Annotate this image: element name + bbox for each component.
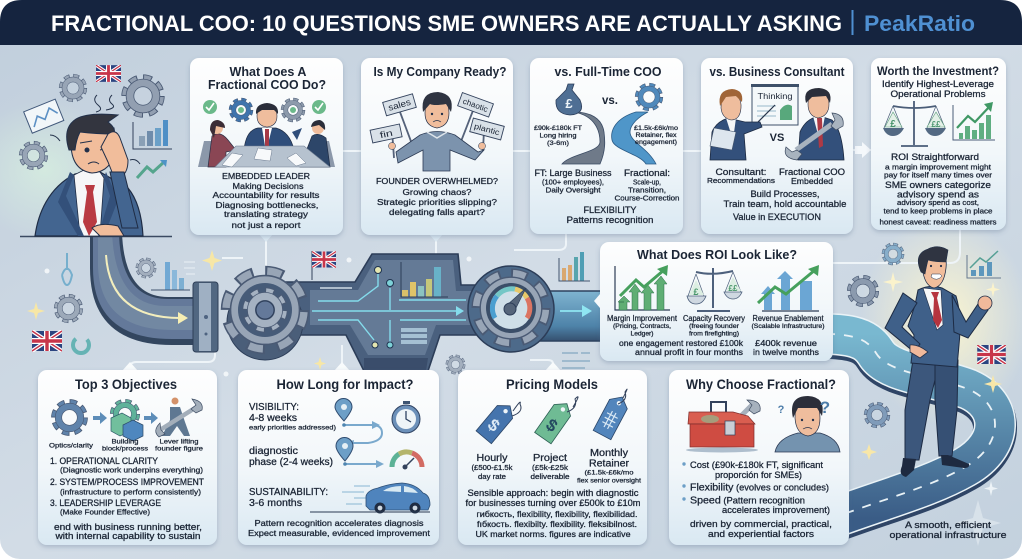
heading: vs. Business Consultant — [710, 65, 845, 79]
revenue caption: (Scalable Infrastructure) — [752, 323, 824, 330]
illustration: overwhelmed founder holding signs: fin — [379, 128, 394, 140]
margin caption: Ledger) — [630, 330, 654, 338]
illustration: overwhelmed founder holding signs: plantic — [473, 122, 501, 137]
body text: Making Decisions — [232, 181, 304, 191]
mini bar chart — [401, 262, 448, 297]
takeaway: FLEXIBILITY — [584, 205, 637, 215]
summary text: Value in EXECUTION — [733, 212, 821, 222]
objectives list: 3. LEADERSHIP LEVERAGE — [50, 498, 161, 508]
icon: teal swirl — [73, 337, 89, 353]
icon: green arrow — [137, 162, 164, 178]
illustration: money road and gear road: £ — [565, 96, 573, 111]
body text: delegating falls apart? — [389, 207, 485, 217]
summary text: Train team, hold accountable — [724, 199, 846, 209]
timeline text: early priorities addressed) — [249, 424, 336, 432]
card background — [871, 58, 1006, 230]
icon captions: Lever lifting — [160, 438, 199, 446]
objectives list — [50, 456, 205, 516]
panel: what does a fractional COO do: Fractional COO Do? — [208, 78, 326, 92]
margin caption — [607, 314, 678, 338]
card background — [190, 58, 343, 235]
closing note — [690, 519, 832, 539]
bullets: Flexibility (evolves or concludes) — [690, 482, 829, 494]
panel: what does ROI look like — [594, 242, 833, 361]
hourly price — [472, 453, 513, 481]
timeline text: diagnostic — [249, 446, 298, 457]
icon: hourly tag: $ — [484, 415, 504, 436]
left arm — [885, 293, 920, 352]
bullets: proporción for SMEs) — [715, 470, 802, 480]
card pointer — [122, 362, 138, 371]
icon: lever figure — [156, 398, 202, 437]
closing note: and experiential factors — [708, 529, 815, 539]
bent pipe — [90, 232, 205, 345]
project price: deliverable — [530, 474, 570, 481]
hourly price: day rate — [478, 474, 506, 481]
heading: Worth the Investment? — [877, 66, 999, 78]
shoes — [901, 455, 969, 477]
raised forearm — [110, 172, 138, 228]
heading: Top 3 Objectives — [75, 377, 177, 392]
icon: gear — [137, 259, 155, 277]
fractional text: Fractional COO — [779, 167, 845, 177]
timeline text: VISIBILITY: — [249, 402, 299, 413]
icon: UK flag on pipe — [312, 251, 336, 280]
closing note: driven by commercial, practical, — [690, 519, 832, 529]
worried founder illustration — [20, 65, 172, 237]
card pointer — [545, 362, 561, 371]
icon: confused person: ? — [778, 404, 785, 416]
margin caption: (Pricing, Contracts, — [613, 323, 671, 330]
icon: balance scales: £ — [890, 119, 896, 130]
heading: What Does A — [230, 65, 306, 79]
body text: Growing chaos? — [402, 187, 472, 197]
hair — [918, 247, 948, 274]
illustration: money road and gear road — [556, 84, 661, 164]
card background — [238, 370, 439, 545]
bullets: accelerates improvement) — [722, 505, 830, 515]
body text: a margin improvement might — [885, 162, 991, 172]
illustration: consultant — [710, 89, 762, 160]
icon: confused person: ? — [820, 398, 830, 417]
icon captions: Optics/clarity — [49, 442, 94, 450]
summary text — [724, 189, 846, 222]
icon: capacity scales — [687, 268, 742, 311]
FT figures — [534, 125, 582, 147]
icon: route with pins — [335, 398, 384, 468]
summary text: Build Processes, — [750, 189, 820, 199]
card pointer — [334, 362, 350, 371]
heading: vs. Full-Time COO — [554, 65, 662, 79]
icon: gears and chart — [850, 245, 1001, 304]
fractional figures: £1.5k-£6k/mo — [634, 125, 678, 132]
icon: broken gear — [866, 404, 888, 426]
header band — [0, 0, 1022, 45]
big gear — [227, 274, 303, 360]
left leg — [905, 360, 940, 460]
consultant text — [707, 167, 775, 185]
illustration: overwhelmed founder holding signs — [370, 92, 504, 171]
FT comparison: (100+ employees), — [542, 178, 604, 186]
icon: monthly tag — [593, 392, 631, 440]
icon: gears and flag — [21, 65, 161, 168]
timeline text — [249, 402, 336, 509]
icon: growth chart — [953, 102, 995, 140]
body text: SME owners categorize — [885, 180, 991, 190]
objectives list: 2. SYSTEM/PROCESS IMPROVEMENT — [50, 477, 205, 487]
caption: operational infrastructure — [890, 530, 1007, 540]
icon: line chart card — [24, 99, 64, 133]
card pointer — [594, 294, 600, 308]
heading: Is My Company Ready? — [374, 65, 506, 79]
eyes and mouth — [80, 141, 108, 164]
fractional text: Embedded — [791, 176, 833, 186]
capacity caption — [683, 314, 745, 338]
circuit lines — [312, 274, 466, 342]
heading: Why Choose Fractional? — [686, 377, 836, 392]
project price: Project — [533, 453, 567, 464]
fractional comparison: Fractional: — [624, 168, 670, 178]
monthly retainer price: Monthly — [590, 448, 628, 459]
data rows — [401, 328, 427, 344]
closing note: Pattern recognition accelerates diagnosis — [254, 518, 424, 528]
vs label: vs. — [602, 95, 618, 107]
card pointer — [429, 234, 443, 242]
FT comparison: FT: Large Business — [534, 168, 612, 178]
icon captions: block/process — [102, 446, 149, 452]
caption — [890, 520, 1007, 540]
consultant text: Consultant: — [716, 167, 766, 177]
tie — [83, 185, 97, 236]
bullets: Cost (£90k-£180k FT, significant — [690, 460, 823, 470]
consultant text: Recommendations — [707, 176, 775, 185]
proof points — [619, 338, 819, 357]
desk — [20, 236, 172, 238]
body text: Strategic priorities slipping? — [377, 197, 497, 207]
proof points: in twelve months — [753, 347, 819, 357]
card background — [701, 58, 853, 234]
icon: arrow — [93, 412, 107, 424]
icon: stopwatch — [392, 401, 420, 433]
hair — [67, 114, 118, 150]
proof points: £400k revenue — [755, 338, 817, 348]
FT comparison — [534, 168, 612, 194]
timeline text: SUSTAINABILITY: — [249, 487, 328, 498]
icon: gear left — [56, 296, 81, 321]
body text: Diagnosing bottlenecks, — [216, 200, 318, 210]
icon: project tag — [535, 398, 575, 444]
card background — [669, 370, 849, 545]
shirt and tie — [923, 288, 943, 330]
icon: small bar chart right — [559, 252, 590, 281]
FT figures: Long hiring — [540, 132, 577, 140]
pricing notes: Sensible approach: begin with diagnostic — [468, 488, 639, 498]
closing note: Expect measurable, evidenced improvement — [248, 528, 431, 538]
card background — [361, 58, 513, 235]
circuit nodes — [372, 266, 394, 348]
closing note: end with business running better, — [54, 522, 202, 532]
lapels — [58, 172, 118, 236]
panel: vs business consultant — [701, 58, 853, 234]
small decorations around pipe — [27, 250, 590, 376]
fractional comparison — [614, 168, 680, 202]
project price — [530, 453, 570, 481]
icon: balance scales: ££ — [932, 120, 941, 129]
road to the right-hand leader — [790, 334, 995, 522]
icon: UK flag — [977, 345, 1006, 364]
pricing notes — [466, 488, 640, 539]
heading: How Long for Impact? — [276, 377, 414, 392]
pricing notes: for businesses turning over £500k to £10m — [466, 498, 640, 508]
connecting pipe body — [270, 254, 490, 371]
subheading: Identify Highest-Leverage — [882, 79, 994, 89]
panel: vs full-time COO — [530, 58, 683, 234]
face — [71, 126, 116, 173]
gauge arc — [492, 289, 530, 318]
hourly price: (£500-£1.5k — [472, 465, 513, 472]
fractional comparison: Scale-up, — [633, 178, 661, 186]
pricing notes: fıбкость. flexibilty. flexibility. fleksibilnost. — [477, 520, 637, 529]
head — [922, 248, 946, 288]
capacity caption: (freeing founder — [689, 323, 739, 330]
monthly retainer price: flex senior oversight — [577, 478, 641, 484]
body text — [880, 152, 997, 226]
shirt — [74, 170, 104, 236]
closing note: with internal capability to sustain — [54, 531, 201, 541]
body text: advisory spend as cost, — [897, 200, 979, 207]
icon: arrow — [144, 412, 158, 424]
right arm — [952, 295, 988, 338]
icon: revenue chart — [758, 265, 819, 311]
subheading — [882, 79, 994, 99]
panel: pricing models — [458, 362, 647, 545]
panel: worth the investment — [871, 58, 1006, 230]
icon: arrow between consultant and worth cards — [855, 142, 871, 158]
gauge gear — [468, 266, 554, 352]
body text — [376, 176, 498, 217]
FT figures: £90k-£180k FT — [534, 125, 582, 132]
FT figures: (3-6m) — [547, 140, 569, 147]
icon: capacity scales: £ — [693, 287, 699, 297]
proof points: annual profit in four months — [635, 347, 743, 357]
icon: sparkle — [202, 250, 222, 271]
fractional text — [779, 167, 845, 186]
bullets: Speed (Pattern recognition — [690, 496, 805, 506]
proof points: one engagement restored £100k — [619, 338, 744, 348]
card background — [458, 370, 647, 545]
timeline text: 3-6 months — [249, 498, 302, 509]
subheading: Operational Problems — [890, 89, 986, 99]
icon captions: founder figure — [155, 446, 203, 452]
body text — [212, 171, 320, 230]
hourly price: Hourly — [476, 453, 508, 464]
icon: sparkle below — [314, 357, 326, 370]
body text: not just a report — [232, 220, 301, 230]
icon: tag strings — [512, 389, 627, 416]
caption: A smooth, efficient — [905, 520, 992, 530]
monthly retainer price: Retainer — [589, 458, 630, 470]
connector lines — [130, 150, 960, 372]
icon captions: Building — [112, 438, 139, 446]
objectives list: (Diagnostic work underpins everything) — [60, 466, 203, 474]
revenue caption: Revenue Enablement — [752, 314, 824, 323]
successful leader illustration — [850, 245, 1007, 546]
project price: (£5k-£25k — [532, 465, 569, 472]
whiteboard — [751, 84, 799, 125]
icon: gear optics — [54, 402, 85, 433]
pricing notes: гибкость, flexibility, flexibility, flexibilidad. — [476, 510, 638, 519]
icon: car — [310, 483, 430, 514]
hand on forehead — [101, 132, 128, 176]
icon: blue pin — [62, 253, 72, 285]
suit — [35, 172, 143, 236]
objectives list: (Make Founder Effective) — [60, 508, 150, 516]
icon captions — [49, 438, 203, 452]
body text: translating strategy — [224, 209, 309, 219]
right leg — [935, 360, 958, 456]
closing note — [248, 518, 431, 538]
card pointer — [259, 234, 273, 242]
title: FRACTIONAL COO: 10 QUESTIONS SME OWNERS ARE ACTUALLY ASKING — [51, 11, 842, 36]
card background — [38, 370, 217, 545]
icon: capacity scales: ££ — [729, 284, 738, 293]
illustration: overwhelmed founder holding signs: sales — [387, 97, 412, 113]
icon: margin chart — [615, 265, 670, 310]
monthly retainer price: (£1.5k-£6k/mo — [584, 470, 634, 476]
icon: sparkle left — [27, 302, 45, 320]
body text: honest caveat: readiness matters — [880, 218, 997, 226]
illustration: overwhelmed founder holding signs: chaotic — [462, 97, 489, 114]
body text: tend to keep problems in place — [884, 206, 992, 216]
icon: building blocks — [111, 402, 143, 441]
fractional comparison: Course-Correction — [614, 194, 680, 202]
closing note — [54, 522, 202, 541]
blue outflow pipe — [540, 291, 602, 341]
icon: hourly tag — [476, 399, 518, 444]
icon: mini gear below — [447, 356, 464, 373]
card background — [530, 58, 683, 234]
body text: EMBEDDED LEADER — [222, 171, 310, 181]
icon: bar chart — [133, 120, 172, 149]
bullets — [682, 460, 830, 515]
icon: gauge — [392, 452, 422, 470]
vs label: VS — [770, 132, 784, 144]
fractional figures — [634, 125, 678, 146]
icon: confused person — [775, 396, 840, 452]
panel: what does a fractional COO do — [190, 58, 343, 242]
body text: advisory spend as — [897, 190, 979, 200]
icon: balance scales — [883, 101, 946, 146]
fist and hand — [978, 296, 992, 310]
fractional comparison: Transition, — [628, 186, 666, 194]
margin caption: Margin Improvement — [607, 314, 678, 323]
fractional figures: Retainer, flex — [636, 132, 677, 139]
icon: UK flag left — [32, 331, 62, 351]
body text: pay for itself many times over — [884, 170, 993, 180]
divider — [852, 10, 854, 35]
heading: Pricing Models — [506, 377, 598, 392]
panel: why choose fractional — [669, 370, 849, 545]
icon: toolbox with wrench — [686, 400, 760, 452]
fractional figures: engagement) — [635, 139, 677, 146]
panel: is my company ready — [361, 58, 513, 242]
takeaway — [566, 205, 654, 225]
panel: top 3 objectives — [38, 362, 217, 545]
capacity caption: from firefighting) — [689, 330, 739, 338]
flange — [193, 282, 218, 352]
objectives list: 1. OPERATIONAL CLARITY — [50, 456, 158, 466]
body text: Accountability for results — [212, 190, 320, 200]
resting hand — [92, 224, 124, 236]
pricing notes: UK market norms. figures are indicative — [476, 529, 631, 539]
jacket — [908, 286, 960, 367]
icon: small bar chart — [151, 262, 195, 290]
FT comparison: Daily Oversight — [546, 186, 600, 194]
body text: ROI Straightforward — [891, 152, 979, 163]
body text: FOUNDER OVERWHELMED? — [376, 176, 498, 186]
takeaway: Patterns recognition — [566, 215, 654, 225]
objectives list: (infrastructure to perform consistently) — [60, 488, 201, 496]
whiteboard: Thinking — [758, 91, 793, 101]
capacity caption: Capacity Recovery — [683, 314, 745, 323]
control panel — [310, 260, 480, 371]
icon: project tag: $ — [542, 415, 561, 436]
monthly retainer price — [577, 448, 641, 484]
revenue caption — [752, 314, 824, 330]
pipeline — [90, 232, 602, 371]
illustration: fractional COO with wrench — [785, 88, 844, 160]
brand: PeakRatio — [864, 11, 975, 36]
timeline text: 4-8 weeks — [249, 413, 297, 424]
illustration: meeting — [198, 100, 335, 167]
panel: how long for impact — [238, 362, 439, 545]
card background — [600, 242, 833, 361]
decorative legend — [562, 353, 590, 368]
heading: What Does ROI Look Like? — [637, 247, 797, 262]
sparkles — [861, 272, 1002, 546]
timeline text: phase (2-4 weeks) — [249, 457, 333, 468]
